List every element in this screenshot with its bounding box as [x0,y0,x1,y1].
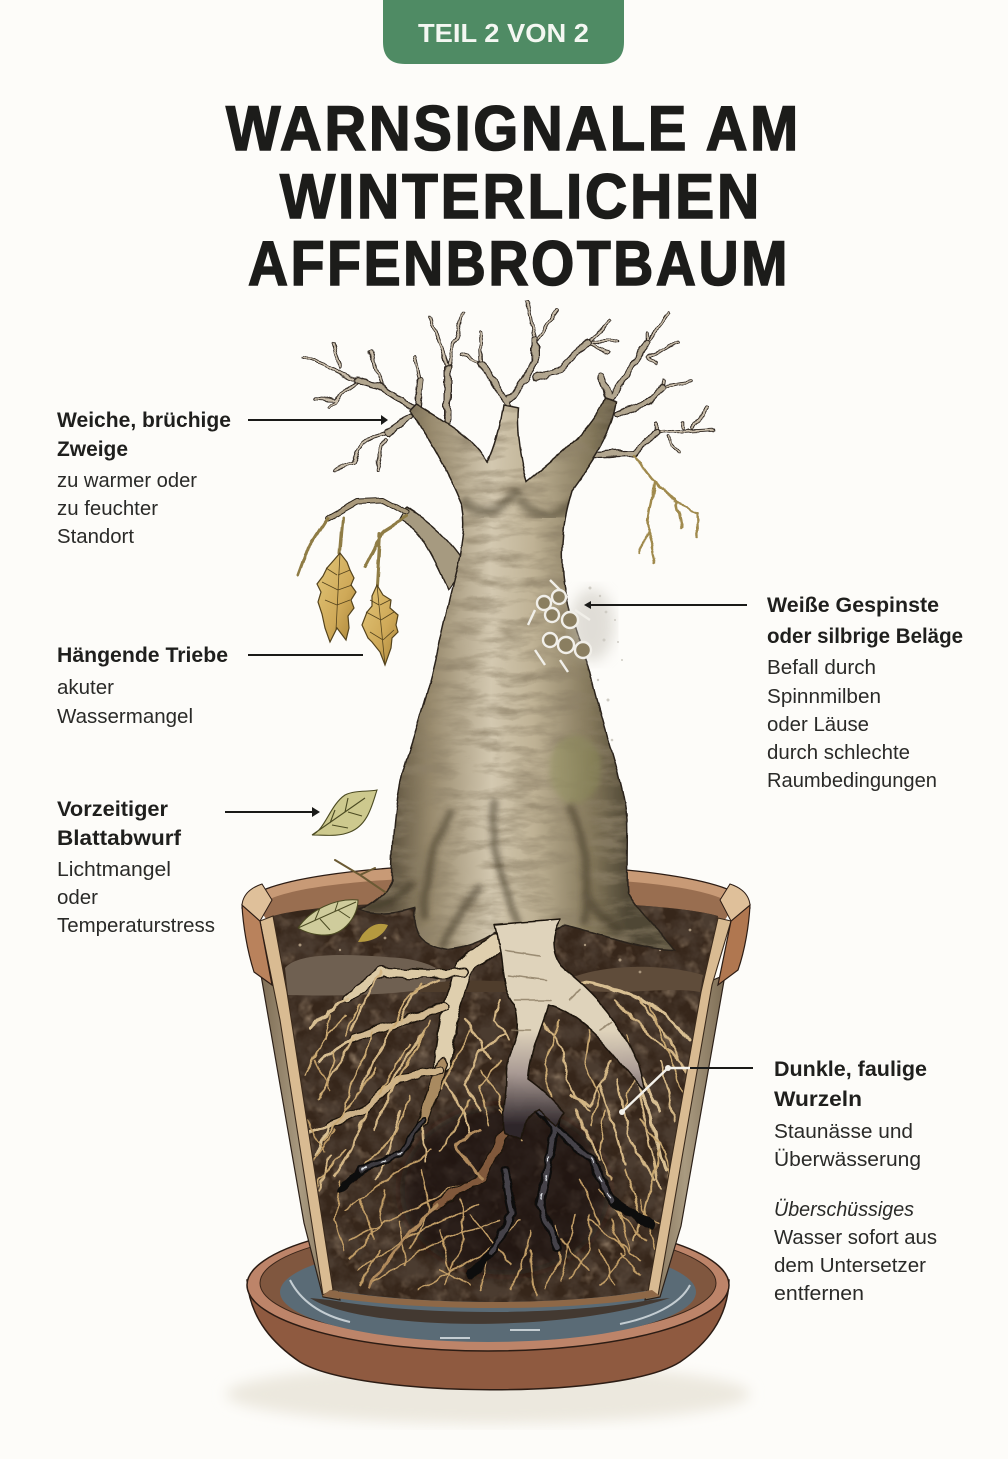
callout: Vorzeitiger Blattabwurf [57,798,320,937]
pot rim front [242,884,750,985]
saucer [247,1219,729,1390]
callout: Weiße Gespinste: oder silbrige Beläge [767,625,963,648]
callout: Weiche, brüchige Zweige [57,409,388,548]
illustration: baobab tree [298,302,713,1140]
trunk [350,395,690,960]
callout: Weiße Gespinste: Weiße Gespinste [767,594,939,617]
drooping branch left [298,500,466,590]
callout: Dunkle, faulige Wurzeln: Überschüssiges [774,1199,914,1221]
pot rim back [242,864,750,930]
title [226,94,801,299]
callout: Weiche, brüchige Zweige: Weiche, brüchige [57,409,231,432]
pot cut edges [260,916,731,1308]
soil [274,904,718,1302]
callout: Weiße Gespinste: Raumbedingungen [767,770,937,792]
callout: Dunkle, faulige Wurzeln: entfernen [774,1283,864,1305]
badge: Teil 2 von 2 [383,0,624,64]
callout: Vorzeitiger Blattabwurf: oder [57,887,98,909]
fallen leaf on soil [298,860,388,942]
callout: Weiche, brüchige Zweige: zu feuchter [57,498,158,520]
water in saucer [280,1242,696,1342]
callout: Dunkle, faulige Wurzeln: Staunässe und [774,1121,913,1143]
callout: Dunkle, faulige Wurzeln: Wasser sofort aus [774,1227,937,1249]
callout: Weiße Gespinste: durch schlechte [767,742,910,764]
callout: Dunkle, faulige Wurzeln: Dunkle, faulige [774,1058,927,1081]
hanging twigs right [633,455,698,562]
callout: Weiße Gespinste: Spinnmilben [767,686,881,708]
callout: Vorzeitiger Blattabwurf: Vorzeitiger [57,798,168,821]
badge: Teil 2 von 2: TEIL 2 VON 2 [418,18,589,48]
rotting dark roots [340,1110,650,1287]
callout: Weiche, brüchige Zweige: Zweige [57,438,128,461]
callout: Vorzeitiger Blattabwurf: Blattabwurf [57,827,182,850]
callout: Vorzeitiger Blattabwurf: Temperaturstress [57,915,215,937]
callout: Hängende Triebe [57,644,363,728]
pot outer wall [261,975,725,1300]
hanging leaf 1 [317,553,356,642]
upper branches [303,302,713,470]
callout: Dunkle, faulige Wurzeln: dem Untersetzer [774,1255,926,1277]
callout: Weiche, brüchige Zweige: zu warmer oder [57,470,197,492]
healthy roots [300,942,690,1295]
title: AFFENBROTBAUM [248,229,790,299]
callout: Hängende Triebe: akuter [57,677,114,699]
callout: Hängende Triebe: Wassermangel [57,706,193,728]
callout: Vorzeitiger Blattabwurf: Lichtmangel [57,859,171,881]
title: WARNSIGNALE AM [226,94,801,164]
callout: Hängende Triebe: Hängende Triebe [57,644,228,667]
callout: Weiche, brüchige Zweige: Standort [57,526,134,548]
falling leaf [312,790,377,835]
callout: Dunkle, faulige Wurzeln [619,1058,937,1305]
callout: Weiße Gespinste: oder Läuse [767,714,869,736]
central tap root over soil [495,920,645,1140]
illustration: pot with saucer and roots [226,864,750,1424]
callout: Dunkle, faulige Wurzeln: Überwässerung [774,1149,921,1171]
callout: Weiße Gespinste [584,594,963,792]
title: WINTERLICHEN [280,162,762,232]
callout: Weiße Gespinste: Befall durch [767,657,876,679]
callout: Dunkle, faulige Wurzeln: Wurzeln [774,1088,862,1111]
white web on trunk [528,580,623,741]
hanging leaf 2 [362,585,398,665]
